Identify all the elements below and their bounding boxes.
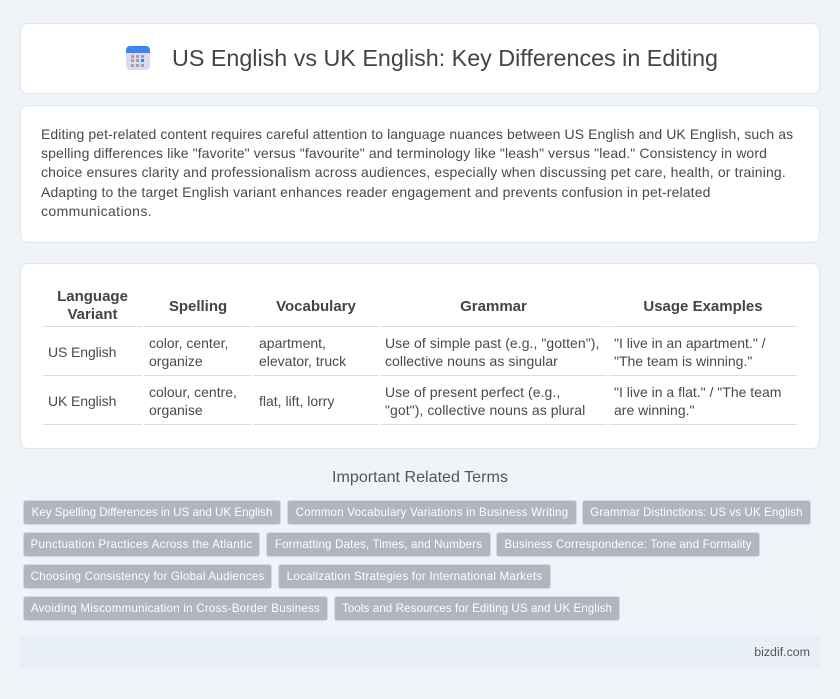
- table header: Spelling: Spelling: [169, 298, 227, 315]
- tag: Grammar Distinctions: US vs UK English: [590, 506, 803, 519]
- tag: Formatting Dates, Times, and Numbers: [275, 538, 482, 551]
- tag: [582, 500, 811, 525]
- US spelling: [149, 335, 228, 369]
- US usage examples: "I live in an apartment." /: [614, 335, 766, 351]
- table header: Language Variant: [57, 288, 128, 323]
- icon: calendar: [126, 46, 150, 70]
- footer site name: bizdif.com: [754, 645, 810, 659]
- comparison table panel: [20, 263, 820, 449]
- tag: [278, 564, 551, 589]
- table header: Usage Examples: Usage Examples: [643, 298, 763, 315]
- US vocabulary: [259, 335, 346, 369]
- tag: [287, 500, 577, 525]
- tag: Tools and Resources for Editing US and UK English: [342, 602, 612, 615]
- header card: [20, 23, 820, 94]
- related terms heading: Important Related Terms: [332, 468, 508, 486]
- intro paragraph text: choice ensures clarity and professionalism across audiences, especially when discussing pet care, health, or training.: [41, 164, 786, 180]
- tag: Punctuation Practices Across the Atlantic: [30, 538, 252, 551]
- tag: Localization Strategies for International Markets: [287, 570, 542, 583]
- US spelling: color, center,: [149, 335, 228, 351]
- tag: Choosing Consistency for Global Audiences: [31, 570, 264, 583]
- US usage examples: "The team is winning.": [614, 353, 752, 369]
- UK vocabulary: flat, lift, lorry: [259, 393, 334, 409]
- UK grammar: [385, 384, 585, 418]
- UK spelling: [149, 384, 237, 418]
- tag: [334, 596, 620, 621]
- tag: [496, 532, 760, 557]
- tag: [23, 596, 328, 621]
- US grammar: [385, 335, 599, 369]
- UK usage examples: [614, 384, 781, 418]
- US grammar: collective nouns as singular: [385, 353, 558, 369]
- tag: Avoiding Miscommunication in Cross-Border Business: [31, 602, 320, 615]
- table header: Vocabulary: Vocabulary: [276, 298, 356, 315]
- UK spelling: organise: [149, 402, 203, 418]
- UK usage examples: "I live in a flat." / "The team: [614, 384, 781, 400]
- intro paragraph text: spelling differences like "favorite" versus "favourite" and terminology like "leash" versus "lead." Consistency in word: [41, 145, 767, 161]
- US usage examples: [614, 335, 766, 369]
- tag: [266, 532, 491, 557]
- table header: Grammar: Grammar: [460, 298, 527, 315]
- intro paragraph text: communications.: [41, 203, 152, 219]
- US vocabulary: apartment,: [259, 335, 326, 351]
- title: US English vs UK English: Key Differences in Editing: [172, 45, 718, 71]
- intro paragraph text: Editing pet-related content requires careful attention to language nuances between US English and UK English, such as: [41, 126, 793, 142]
- table header: Language Variant: Language: [57, 288, 128, 305]
- UK grammar: "got"), collective nouns as plural: [385, 402, 585, 418]
- table header: Language Variant: Variant: [67, 306, 118, 323]
- tag: [23, 532, 260, 557]
- intro paragraph text: [41, 126, 793, 219]
- intro paragraph panel: [20, 105, 820, 243]
- US grammar: Use of simple past (e.g., "gotten"),: [385, 335, 599, 351]
- tag: Business Correspondence: Tone and Formality: [504, 538, 752, 551]
- footer bar: [20, 635, 820, 669]
- tag: [23, 564, 272, 589]
- US spelling: organize: [149, 353, 203, 369]
- intro paragraph text: Adapting to the target English variant enhances reader engagement and prevents confusion in pet-related: [41, 184, 711, 200]
- tag: Common Vocabulary Variations in Business Writing: [296, 506, 568, 519]
- tag: Key Spelling Differences in US and UK English: [32, 506, 272, 519]
- tag: [23, 500, 281, 525]
- row: US English: US English: [48, 344, 116, 360]
- UK grammar: Use of present perfect (e.g.,: [385, 384, 560, 400]
- US vocabulary: elevator, truck: [259, 353, 346, 369]
- UK usage examples: are winning.": [614, 402, 694, 418]
- related terms tags: [23, 500, 811, 621]
- row: UK English: UK English: [48, 393, 116, 409]
- UK spelling: colour, centre,: [149, 384, 237, 400]
